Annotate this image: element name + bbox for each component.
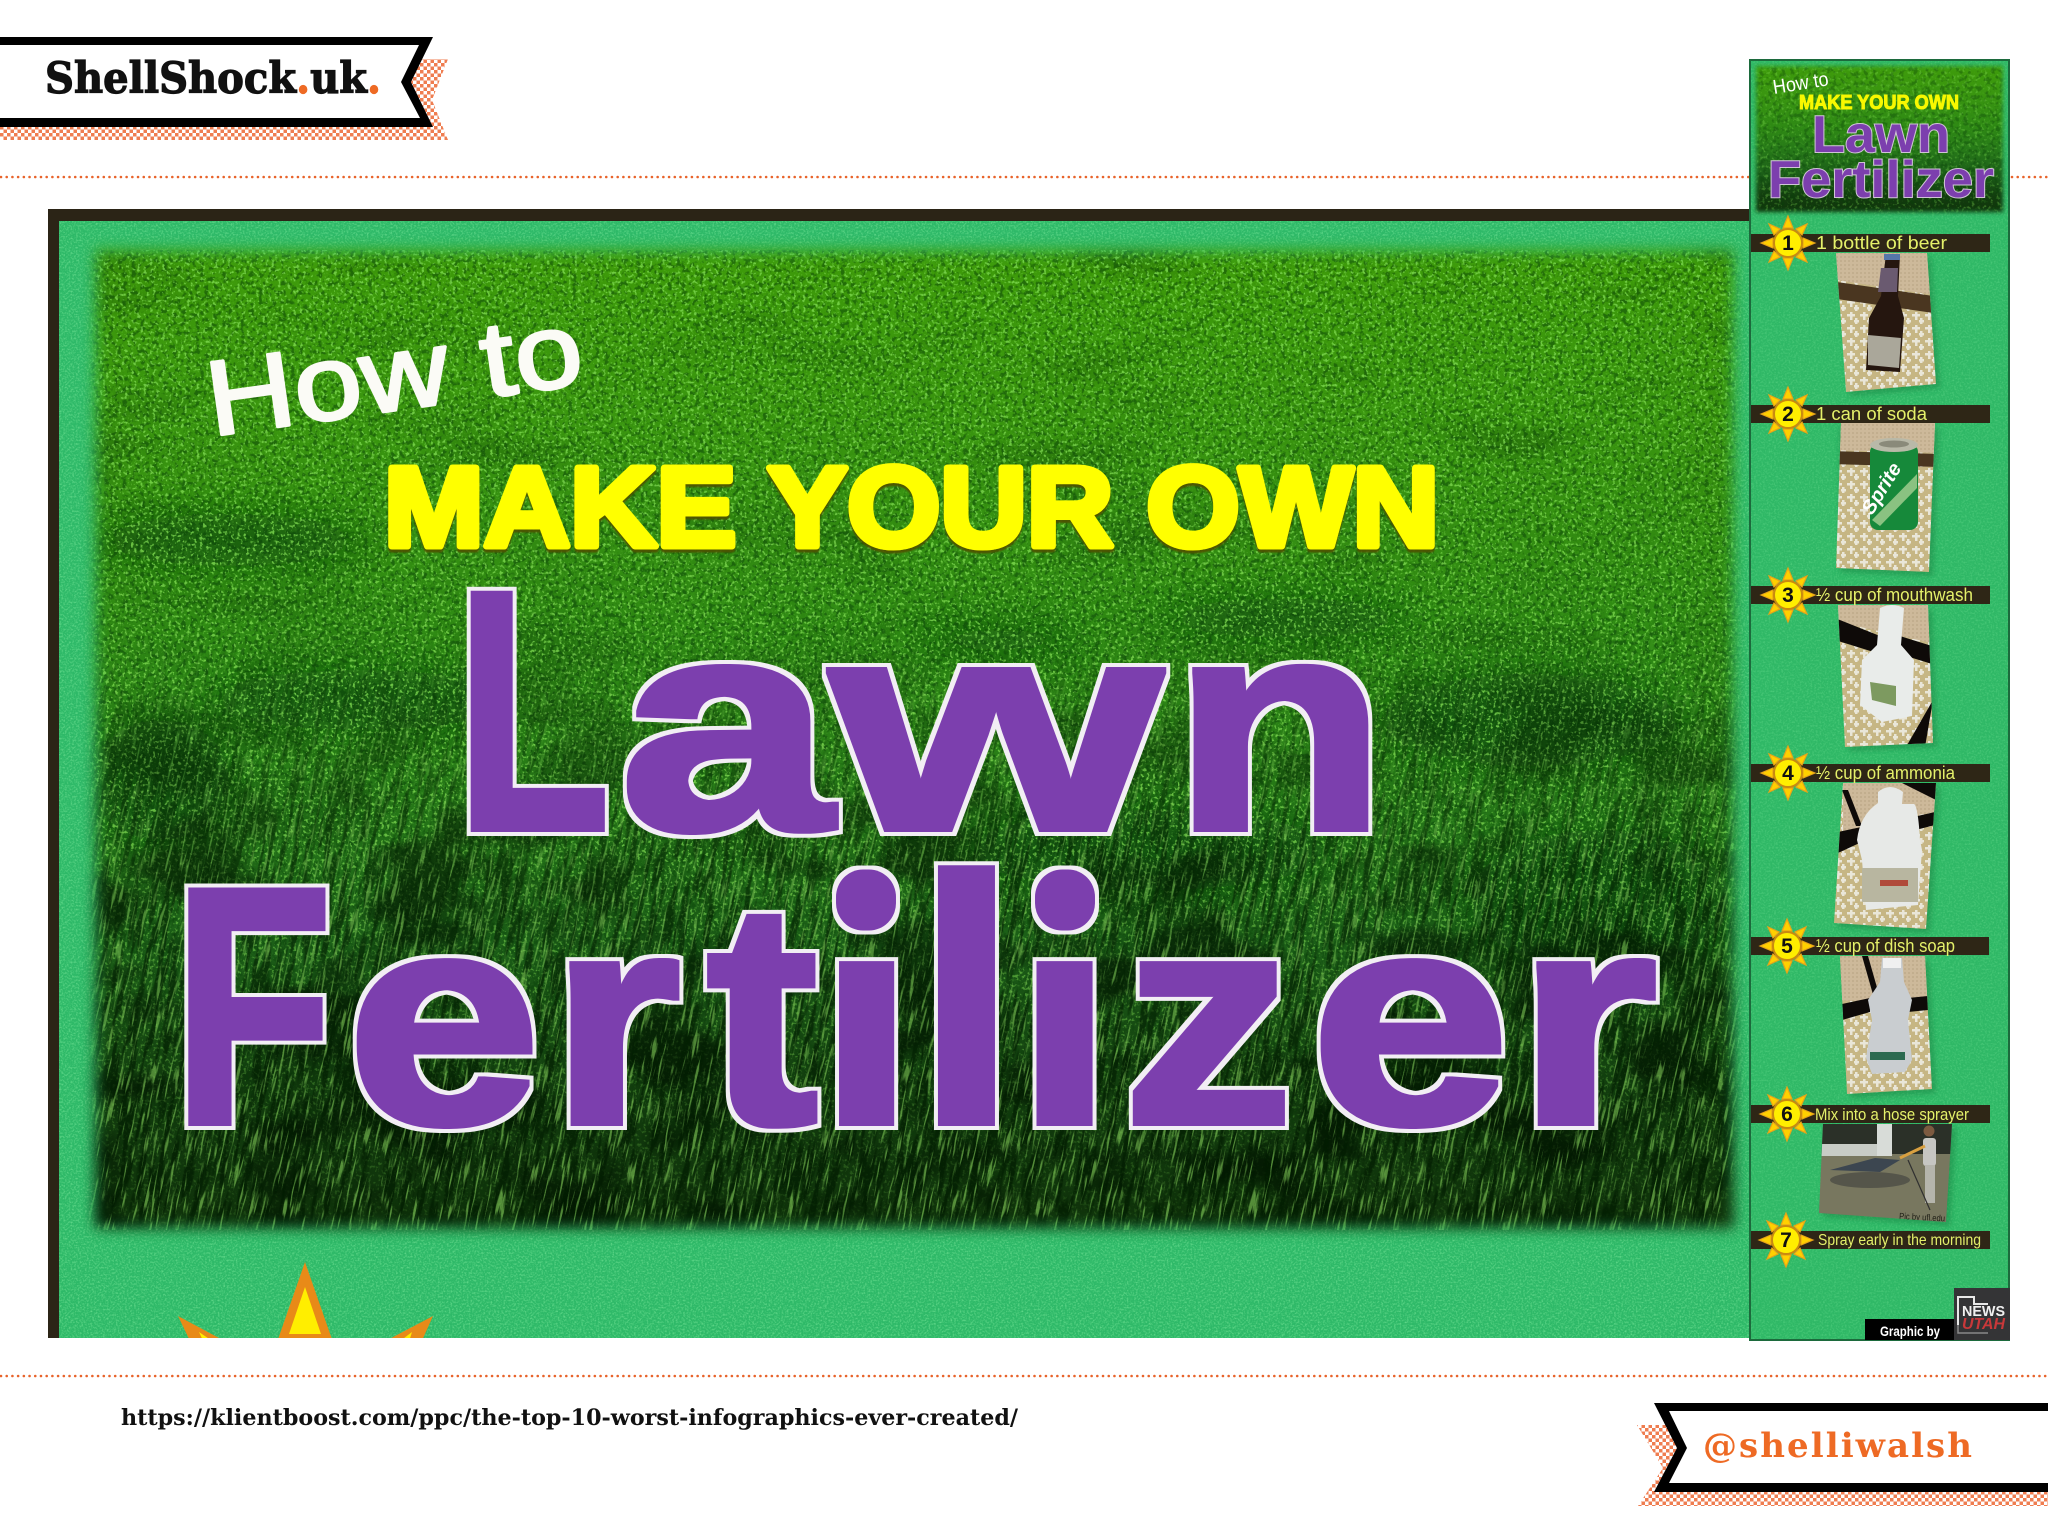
step 2 bar: 2 <box>1782 403 1794 426</box>
"Lawn": a <box>618 557 836 893</box>
"How to" handwritten heading: How to <box>199 289 590 459</box>
step 6 bar: Mix into a hose sprayer <box>1815 1105 1969 1124</box>
step 5 bar: ½ cup of dish soap <box>1816 936 1955 956</box>
"MAKE YOUR OWN" heading: MAKE YOUR OWN <box>384 444 1439 570</box>
"Fertilizer": l <box>915 804 1018 1198</box>
step 5 photo: dish soap bottle <box>1835 950 1940 1100</box>
logo: News Utah <box>1954 1288 2010 1340</box>
"Fertilizer": e <box>346 852 542 1187</box>
"Fertilizer": i <box>1014 850 1115 1187</box>
credit: Graphic by <box>1865 1319 1955 1340</box>
sidebar "Fertilizer": Fertilizer <box>1768 151 1994 209</box>
"Fertilizer": r <box>550 850 682 1187</box>
step 7 bar <box>1751 1213 1990 1267</box>
step 5 bar: 5 <box>1781 935 1793 958</box>
photo credit: Pic by ufl.edu <box>1899 1211 1945 1223</box>
"Fertilizer": z <box>1122 851 1294 1187</box>
bottom dotted divider <box>1 1375 2048 1377</box>
footer banner: @shelliwalsh <box>1637 1403 2048 1506</box>
step 4 photo: ammonia jug <box>1830 780 1940 935</box>
sidebar "How to": How to <box>1771 68 1830 99</box>
Sprite can lettering: Sprite <box>1858 459 1906 519</box>
"Lawn": n <box>1172 557 1387 893</box>
step 4 bar <box>1751 746 1990 800</box>
"Lawn": L <box>457 521 610 902</box>
"Fertilizer": e <box>1310 852 1511 1187</box>
step 2 bar <box>1751 387 1990 441</box>
step 2 bar: 1 can of soda <box>1816 404 1928 424</box>
"Lawn" <box>457 521 1387 902</box>
step 6 bar <box>1751 1087 1990 1141</box>
step 6 bar: 6 <box>1781 1103 1793 1126</box>
step 7 bar: Spray early in the morning <box>1818 1232 1981 1249</box>
"Fertilizer": r <box>1515 852 1658 1187</box>
step 3 bar: 3 <box>1782 584 1794 607</box>
step 5 bar <box>1751 919 1989 973</box>
step 3 bar <box>1751 568 1990 622</box>
footer banner: @shelliwalsh: @shelliwalsh <box>1703 1426 1972 1466</box>
sidebar header image <box>1751 61 2008 221</box>
icon: cropped sun at panel bottom <box>178 1262 433 1345</box>
panel green background <box>59 221 1749 1338</box>
step 4 bar: ½ cup of ammonia <box>1816 763 1956 783</box>
step 1 bar: 1 bottle of beer <box>1816 233 1947 253</box>
header banner: ShellShock.uk: ShellShock.uk. <box>45 54 381 104</box>
"Lawn": w <box>823 557 1164 893</box>
main panel: enlarged infographic title <box>0 209 1930 1345</box>
step 2 photo: soda can <box>1830 420 1940 576</box>
"Fertilizer" <box>174 804 1658 1198</box>
step 3 photo: mouthwash bottle <box>1838 605 1938 752</box>
sidebar "MAKE YOUR OWN": MAKE YOUR OWN <box>1799 92 1959 114</box>
step 6 photo: person with hose sprayer <box>1815 1120 1960 1226</box>
grass photo <box>84 240 1745 1239</box>
header banner: ShellShock.uk <box>0 37 448 140</box>
step 3 bar: ½ cup of mouthwash <box>1816 585 1973 605</box>
top dotted divider <box>1 176 2048 178</box>
sidebar: original infographic <box>1750 60 2010 1340</box>
"Fertilizer": F <box>174 817 332 1195</box>
logo: News Utah: NEWS <box>1962 1304 2005 1320</box>
sidebar "Lawn": Lawn <box>1812 106 1950 164</box>
step 1 bar <box>1751 216 1990 270</box>
step 1 bar: 1 <box>1782 232 1794 255</box>
step 1 photo: beer bottle <box>1830 250 1945 396</box>
source URL: https://klientboost.com/ppc/the-top-10-worst-infographics-ever-created/ <box>121 1405 1019 1431</box>
sidebar background <box>1750 60 2009 1340</box>
"Lawn" and "Fertilizer" heading <box>184 586 1660 1133</box>
step 4 bar: 4 <box>1782 762 1794 785</box>
step 7 bar: 7 <box>1780 1229 1792 1252</box>
credit: Graphic by: Graphic by <box>1880 1324 1940 1339</box>
panel frame <box>48 209 1749 1338</box>
logo: News Utah: UTAH <box>1962 1316 2005 1333</box>
"Fertilizer": t <box>706 838 819 1191</box>
"Fertilizer": i <box>817 852 917 1188</box>
